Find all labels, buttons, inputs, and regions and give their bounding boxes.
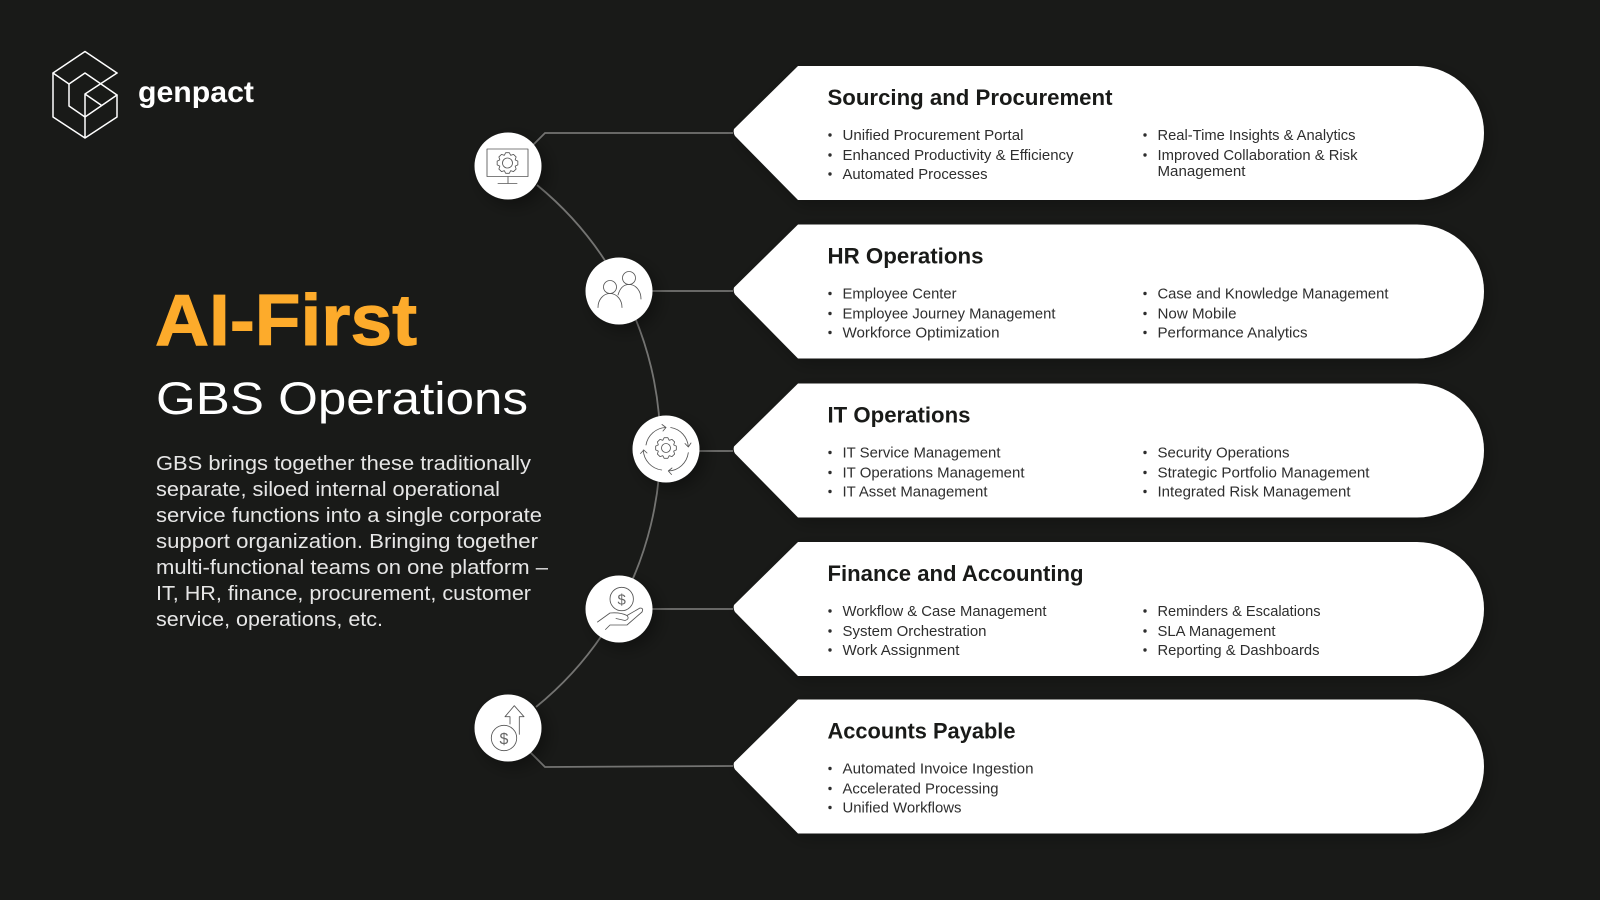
bullets right column: Reporting & Dashboards (1158, 643, 1320, 659)
logo: genpact (53, 52, 254, 138)
bullets left column: Employee Center (842, 286, 957, 302)
heading: HR Operations (828, 244, 984, 268)
bullets left column: Accelerated Processing (842, 782, 998, 798)
icon: genpact hexagon mark (53, 52, 117, 138)
panel: HR Operations (734, 224, 1484, 358)
bullets left column: IT Operations Management (842, 466, 1024, 482)
icon: hand holding coin: $ (618, 592, 627, 608)
bullets left column (828, 446, 1024, 500)
node: IT icon (632, 416, 700, 482)
intro paragraph (156, 452, 549, 631)
bullets left column: System Orchestration (842, 624, 986, 640)
bullets right column (1143, 446, 1370, 500)
intro paragraph: service functions into a single corporate (156, 504, 542, 527)
bullets left column: Unified Procurement Portal (842, 128, 1024, 144)
bullets left column (828, 286, 1056, 342)
bullets left column: Enhanced Productivity & Efficiency (842, 148, 1074, 164)
bullets right column: Security Operations (1158, 446, 1290, 462)
bullets left column: Workflow & Case Management (842, 604, 1046, 620)
bullets right column: Improved Collaboration & Risk (1158, 148, 1358, 164)
icon: coin with up arrow: $ (500, 731, 509, 748)
panel: Sourcing and Procurement (734, 66, 1484, 200)
bullets left column: Automated Invoice Ingestion (842, 762, 1034, 778)
bullets right column (1143, 128, 1358, 180)
node: sourcing icon (474, 132, 542, 200)
bullets right column: SLA Management (1158, 624, 1276, 640)
bullets right column (1143, 286, 1388, 342)
node: HR icon (586, 258, 652, 324)
intro paragraph: support organization. Bringing together (156, 530, 538, 553)
bullets left column: IT Service Management (842, 446, 1000, 462)
bullets right column: Integrated Risk Management (1158, 484, 1350, 500)
connector lines (525, 133, 733, 767)
bullets left column: Work Assignment (842, 643, 960, 659)
bullets right column: Case and Knowledge Management (1158, 286, 1388, 302)
panel: Finance and Accounting (734, 542, 1484, 676)
bullets left column: Workforce Optimization (842, 326, 1000, 342)
panel: IT Operations (734, 384, 1484, 518)
intro paragraph: separate, siloed internal operational (156, 478, 500, 501)
bullets right column: Now Mobile (1158, 306, 1236, 322)
heading: Finance and Accounting (828, 561, 1084, 586)
logo wordmark: genpact (138, 76, 254, 109)
icon: monitor with gear (487, 149, 528, 184)
bullets left column (828, 604, 1046, 659)
bullets left column: IT Asset Management (842, 484, 988, 500)
heading: Sourcing and Procurement (828, 85, 1113, 110)
intro paragraph: service, operations, etc. (156, 608, 383, 631)
heading: Accounts Payable (828, 718, 1016, 744)
heading: IT Operations (828, 402, 970, 428)
node: finance icon (586, 576, 652, 642)
bullets left column (828, 128, 1074, 183)
bullets right column: Performance Analytics (1158, 326, 1308, 342)
bullets right column (1143, 604, 1320, 659)
bullets right column: Reminders & Escalations (1158, 604, 1320, 620)
node: accounts payable icon (474, 694, 542, 762)
bullets left column: Employee Journey Management (842, 306, 1056, 322)
icon: gear with cycle arrows (640, 424, 691, 474)
intro paragraph: multi-functional teams on one platform – (156, 556, 549, 579)
bullets right column: Management (1158, 164, 1246, 180)
bullets right column: Strategic Portfolio Management (1158, 466, 1370, 482)
bullets left column (828, 762, 1034, 816)
bullets right column: Real-Time Insights & Analytics (1158, 128, 1356, 144)
bullets left column: Unified Workflows (842, 800, 962, 816)
heading block (155, 281, 528, 424)
intro paragraph: GBS brings together these traditionally (156, 452, 532, 475)
subtitle: GBS Operations: GBS Operations (156, 373, 528, 424)
intro paragraph: IT, HR, finance, procurement, customer (156, 582, 531, 605)
bullets left column: Automated Processes (842, 167, 988, 183)
icon: two people (598, 272, 641, 308)
panel: Accounts Payable (734, 700, 1484, 834)
title: AI-First: AI-First (155, 281, 417, 361)
